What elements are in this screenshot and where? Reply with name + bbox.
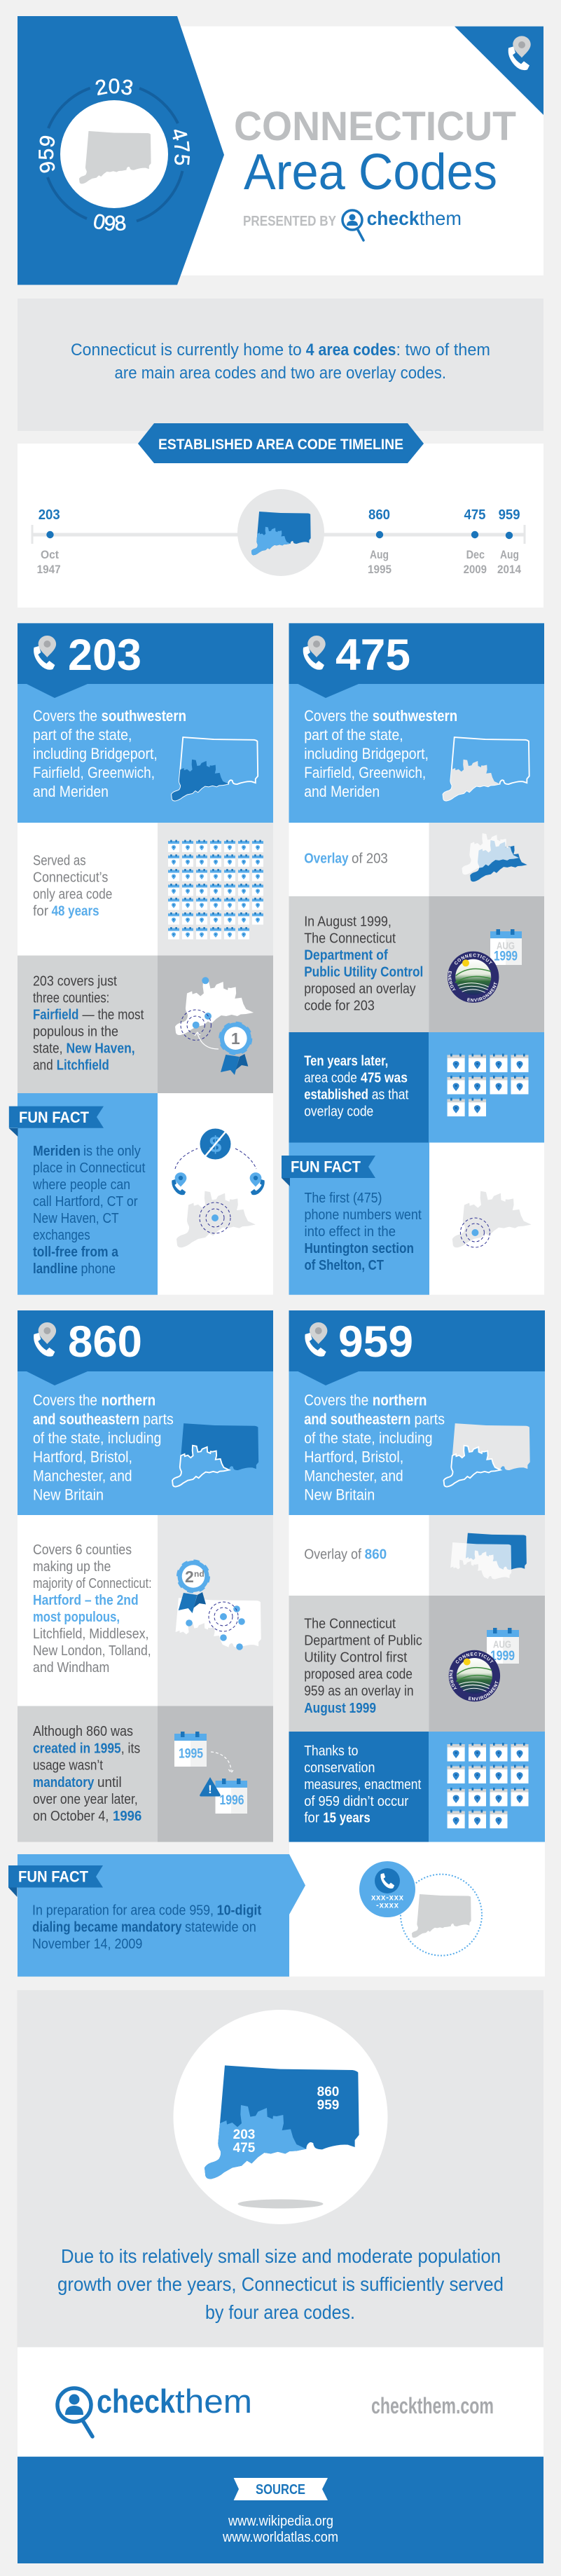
timeline banner: ESTABLISHED AREA CODE TIMELINE xyxy=(158,437,403,453)
860 counties row: Hartford – the 2nd xyxy=(33,1593,139,1608)
source links: www.worldatlas.com xyxy=(222,2530,338,2545)
203 counties xyxy=(18,956,273,1093)
fun fact text: where people can xyxy=(32,1177,130,1193)
203 header: 203 xyxy=(68,631,141,680)
860 counties row xyxy=(18,1515,273,1706)
860 counties row: and Windham xyxy=(33,1660,109,1676)
icon: energy seal: ENERGY xyxy=(449,1669,457,1690)
860 coverage text: and southeastern xyxy=(33,1410,139,1428)
203 coverage text: southwestern xyxy=(102,707,186,725)
203 counties: Fairfield xyxy=(33,1008,78,1023)
icon: calendars 1995 to 1996: ! xyxy=(208,1783,212,1796)
475 ten years row: as that xyxy=(372,1088,409,1103)
959 header: 959 xyxy=(338,1317,413,1366)
959 coverage text: Covers the xyxy=(304,1392,368,1409)
presented by logo: them xyxy=(420,207,462,229)
475 overlay row: of 203 xyxy=(352,851,388,867)
860 coverage text: New Britain xyxy=(33,1486,104,1504)
fun fact text: phone xyxy=(81,1261,116,1277)
fun fact text: In preparation for area code 959, xyxy=(32,1903,214,1919)
icon: energy seal: CONNECTICUT xyxy=(455,953,492,964)
summary map: 860 xyxy=(317,2085,339,2099)
intro panel xyxy=(18,299,543,431)
475 department row xyxy=(289,896,544,1032)
203 coverage text xyxy=(33,707,186,800)
timeline dates: Aug xyxy=(370,548,389,561)
icon: energy seal: ENVIRONMENT xyxy=(468,1680,499,1701)
203 counties: state, xyxy=(33,1041,62,1057)
panel: summary xyxy=(17,1990,543,2348)
panel: 203 xyxy=(9,623,273,1295)
icon: energy seal xyxy=(448,952,499,1003)
203 coverage text: part of the state, xyxy=(33,726,132,744)
timeline labels: 203 xyxy=(39,507,60,523)
icon: overlay maps xyxy=(462,833,527,882)
checkthem logo xyxy=(57,2383,252,2437)
959 coverage text: parts xyxy=(415,1410,445,1428)
fun fact text: call Hartford, CT or xyxy=(33,1194,138,1210)
203 coverage text: and Meriden xyxy=(33,783,109,800)
panel: wide fun fact xyxy=(8,1842,545,1977)
icon: calendars 1995 to 1996: 1995 xyxy=(179,1747,203,1762)
203 coverage text: Covers the xyxy=(33,707,97,725)
icon: ten digit dialing xyxy=(359,1861,482,1956)
475 department row: code for 203 xyxy=(304,999,375,1014)
203 coverage text: Fairfield, Greenwich, xyxy=(33,764,155,781)
959 fifteen years row: Thanks to xyxy=(304,1743,358,1759)
timeline dates: 2009 xyxy=(464,563,487,576)
959 fifteen years row: conservation xyxy=(304,1760,375,1776)
fun fact text: Meriden xyxy=(33,1144,81,1159)
203 counties: three counties: xyxy=(33,991,109,1006)
860 mandatory row: , its xyxy=(121,1741,140,1756)
475 ten years row: Ten years later, xyxy=(304,1054,388,1069)
timeline dates: Aug xyxy=(500,548,519,561)
icon: overlay maps xyxy=(450,1533,527,1580)
icon: ten digit dialing: -xxxx xyxy=(376,1902,399,1910)
475 overlay row xyxy=(289,823,544,896)
summary map: 475 xyxy=(233,2141,256,2156)
959 coverage text: northern xyxy=(373,1392,427,1409)
475 coverage text: southwestern xyxy=(373,707,457,725)
475 coverage text xyxy=(304,707,457,800)
203 counties: populous in the xyxy=(33,1025,118,1040)
fun fact text xyxy=(304,1191,422,1273)
860 coverage text: of the state, including xyxy=(33,1430,161,1446)
860 header: 860 xyxy=(68,1317,142,1366)
203 counties: New Haven, xyxy=(66,1041,135,1057)
fun fact text: landline xyxy=(33,1261,78,1277)
intro panel: Connecticut is currently home to xyxy=(71,341,302,359)
summary text xyxy=(57,2245,504,2323)
blue arrow panel with ring of area codes: 475 xyxy=(172,129,190,165)
title: CONNECTICUT xyxy=(234,104,516,149)
959 overlay row: Overlay of xyxy=(304,1547,361,1563)
860 counties row: most populous, xyxy=(33,1610,120,1625)
860 coverage text: parts xyxy=(143,1410,174,1428)
icon: calendar Aug 1999: 1999 xyxy=(490,1649,515,1664)
icon: calendar Aug 1999: AUG xyxy=(493,1639,511,1651)
source links: www.wikipedia.org xyxy=(228,2514,333,2529)
959 coverage text: Manchester, and xyxy=(304,1467,403,1484)
fun fact ribbon xyxy=(282,1156,375,1186)
203 years: for xyxy=(33,904,48,919)
summary text: Due to its relatively small size and moderate population xyxy=(61,2245,501,2267)
icon: 2nd medal with map: nd xyxy=(194,1569,205,1579)
860 mandatory row: created in 1995 xyxy=(33,1741,121,1756)
source ribbon: SOURCE xyxy=(256,2482,305,2498)
summary text: growth over the years, Connecticut is sufficiently served xyxy=(57,2273,504,2295)
475 department row: proposed an overlay xyxy=(304,982,416,997)
timeline labels xyxy=(39,507,520,523)
fun fact ribbon: FUN FACT xyxy=(19,1109,90,1126)
860 mandatory row: Although 860 was xyxy=(33,1724,133,1739)
475 map xyxy=(443,737,529,801)
475 ten years row: area code xyxy=(304,1071,357,1086)
presented by logo: PRESENTED BY xyxy=(243,214,337,229)
timeline dates: 1947 xyxy=(37,563,61,576)
475 ten years row: overlay code xyxy=(304,1104,373,1120)
fun fact text: into effect in the xyxy=(304,1224,396,1240)
475 header: 475 xyxy=(335,631,410,680)
475 coverage text: including Bridgeport, xyxy=(304,745,429,762)
source links xyxy=(222,2514,338,2545)
fun fact ribbon: FUN FACT xyxy=(291,1158,361,1176)
959 fifteen years row: of 959 didn’t occur xyxy=(304,1794,409,1809)
860 coverage text xyxy=(33,1392,174,1504)
intro panel: 4 area codes xyxy=(306,341,396,359)
15 calendars xyxy=(448,1743,528,1828)
203 counties: Litchfield xyxy=(57,1058,109,1074)
860 mandatory row: mandatory xyxy=(33,1775,95,1790)
icon: calendar Aug 1999 xyxy=(490,929,522,965)
fun fact text xyxy=(32,1144,146,1277)
959 fifteen years row: 15 years xyxy=(323,1811,370,1826)
203 years: Served as xyxy=(33,854,86,869)
860 counties row: Litchfield, Middlesex, xyxy=(33,1626,148,1642)
website: checkthem.com xyxy=(371,2393,494,2418)
959 coverage text xyxy=(304,1392,445,1504)
icon: calendar Aug 1999: 1999 xyxy=(494,950,518,964)
475 coverage text: Covers the xyxy=(304,707,368,725)
panel: logo xyxy=(18,2348,543,2457)
475 department row: Public Utility Control xyxy=(304,965,423,980)
source ribbon xyxy=(234,2478,328,2500)
timeline map xyxy=(237,489,324,576)
title xyxy=(234,104,516,200)
icon: toll-free call diagram: $ xyxy=(209,1132,222,1157)
fun fact text: of Shelton, CT xyxy=(304,1258,384,1273)
475 ten years row: established xyxy=(304,1088,368,1103)
timeline dots xyxy=(46,531,513,539)
timeline labels: 860 xyxy=(368,507,390,523)
475 ten years row: 475 was xyxy=(361,1071,408,1086)
fun fact ribbon xyxy=(9,1107,104,1137)
959 coverage text: and southeastern xyxy=(304,1410,410,1428)
blue arrow panel with ring of area codes: 203 xyxy=(95,78,133,95)
presented by logo xyxy=(243,207,462,240)
icon: calendars 1995 to 1996 xyxy=(174,1732,247,1814)
860 counties row: New London, Tolland, xyxy=(33,1643,151,1659)
timeline banner xyxy=(138,423,424,463)
475 header xyxy=(289,623,544,823)
203 counties: and xyxy=(33,1058,53,1074)
fun fact text: New Haven, CT xyxy=(33,1211,119,1226)
timeline dates xyxy=(37,548,521,576)
icon: county map with medal xyxy=(175,977,254,1075)
203 years: 48 years xyxy=(52,904,99,919)
959 department row: August 1999 xyxy=(304,1701,376,1716)
959 department row xyxy=(289,1596,545,1732)
959 department row: Utility Control first xyxy=(304,1650,408,1665)
203 years: Connecticut’s xyxy=(33,870,108,886)
timeline dates: Oct xyxy=(41,548,59,561)
959 header xyxy=(289,1310,545,1515)
timeline panel xyxy=(18,444,543,608)
fun fact text xyxy=(32,1903,262,1952)
203 counties: — the most xyxy=(83,1008,144,1023)
fun fact text: 10-digit xyxy=(217,1903,262,1919)
blue arrow panel with ring of area codes: 098 xyxy=(94,214,126,231)
icon: 2nd medal with map: 2 xyxy=(185,1568,194,1586)
icon: toll-free call diagram xyxy=(172,1128,265,1247)
203 header xyxy=(18,623,273,823)
860 mandatory row: on October 4, xyxy=(33,1809,109,1824)
fun fact text: place in Connecticut xyxy=(33,1160,146,1176)
fun fact text: November 14, 2009 xyxy=(32,1937,142,1952)
fun fact text: is the only xyxy=(83,1144,141,1159)
860 map xyxy=(172,1423,258,1487)
959 fifteen years row: for xyxy=(304,1811,319,1826)
959 coverage text: New Britain xyxy=(304,1486,375,1504)
203 coverage text: including Bridgeport, xyxy=(33,745,158,762)
summary text: by four area codes. xyxy=(205,2301,355,2323)
959 overlay row: 860 xyxy=(365,1547,387,1563)
summary map: 959 xyxy=(317,2098,339,2113)
203 years xyxy=(18,823,273,956)
icon: calendar Aug 1999: AUG xyxy=(497,940,515,952)
icon: calendar Aug 1999 xyxy=(487,1628,519,1664)
860 coverage text: Manchester, and xyxy=(33,1467,132,1484)
timeline dates: 2014 xyxy=(497,563,521,576)
panel: source xyxy=(18,2457,543,2563)
959 fifteen years row xyxy=(289,1732,545,1842)
203 years: only area code xyxy=(33,887,112,903)
959 overlay row xyxy=(289,1515,545,1596)
475 coverage text: Fairfield, Greenwich, xyxy=(304,764,426,781)
timeline dates: Dec xyxy=(466,548,485,561)
fun fact text: The first (475) xyxy=(304,1191,382,1206)
fun fact ribbon: FUN FACT xyxy=(18,1868,89,1885)
203 counties: 203 covers just xyxy=(33,974,117,989)
fun fact text: dialing became mandatory xyxy=(32,1920,182,1936)
860 coverage text: northern xyxy=(102,1392,155,1409)
860 mandatory row: 1996 xyxy=(113,1809,141,1824)
header panel xyxy=(18,16,543,285)
icon: calendars 1995 to 1996: 1996 xyxy=(220,1793,244,1808)
475 department row: The Connecticut xyxy=(304,931,396,947)
panel: 959 xyxy=(289,1310,545,1842)
icon: energy seal: ENVIRONMENT xyxy=(467,982,497,1002)
corner phone badge xyxy=(455,27,543,115)
475 coverage text: part of the state, xyxy=(304,726,403,744)
959 department row: Department of Public xyxy=(304,1633,422,1648)
959 fifteen years row: measures, enactment xyxy=(304,1777,422,1793)
475 department row: Department of xyxy=(304,948,388,964)
959 coverage text: of the state, including xyxy=(304,1430,433,1446)
timeline labels: 959 xyxy=(499,507,520,523)
860 mandatory row: until xyxy=(97,1775,122,1790)
10 calendars xyxy=(448,1054,528,1116)
860 mandatory row xyxy=(18,1706,273,1842)
blue arrow panel with ring of area codes: 959 xyxy=(39,136,55,172)
fun fact text: toll-free from a xyxy=(33,1245,119,1260)
203 fun fact xyxy=(9,1093,273,1295)
icon: energy seal xyxy=(448,1650,500,1701)
475 fun fact xyxy=(282,1142,544,1295)
intro panel: are main area codes and two are overlay codes. xyxy=(115,364,446,383)
fun fact text: Huntington section xyxy=(304,1241,414,1256)
checkthem logo: them xyxy=(175,2383,252,2420)
860 coverage text: Hartford, Bristol, xyxy=(33,1448,132,1466)
860 mandatory row: usage wasn’t xyxy=(33,1758,103,1773)
48 calendars xyxy=(168,840,263,939)
860 mandatory row: over one year later, xyxy=(33,1792,138,1807)
475 department row: In August 1999, xyxy=(304,914,392,930)
475 overlay row: Overlay xyxy=(304,851,349,867)
icon: county map with medal: 1 xyxy=(231,1029,240,1048)
fun fact text: exchanges xyxy=(33,1228,90,1243)
959 map xyxy=(444,1423,530,1487)
860 counties row: making up the xyxy=(33,1559,111,1575)
timeline labels: 475 xyxy=(464,507,486,523)
blue arrow panel with ring of area codes xyxy=(18,16,224,285)
panel: 860 xyxy=(18,1310,273,1842)
475 coverage text: and Meriden xyxy=(304,783,380,800)
959 department row: proposed area code xyxy=(304,1667,413,1683)
203 map xyxy=(172,737,258,801)
panel: 475 xyxy=(282,623,544,1295)
475 ten years row xyxy=(289,1032,544,1142)
fun fact text: phone numbers went xyxy=(304,1207,422,1223)
fun fact text: statewide on xyxy=(185,1920,256,1936)
summary map xyxy=(174,2010,388,2224)
fun fact ribbon xyxy=(8,1865,103,1897)
860 header xyxy=(18,1310,273,1515)
intro panel: : two of them xyxy=(396,341,490,359)
959 department row: 959 as an overlay in xyxy=(304,1684,414,1699)
860 counties row: Covers 6 counties xyxy=(33,1542,132,1558)
959 coverage text: Hartford, Bristol, xyxy=(304,1448,403,1466)
959 department row: The Connecticut xyxy=(304,1616,396,1631)
timeline dates: 1995 xyxy=(368,563,392,576)
icon: energy seal: ENERGY xyxy=(448,971,456,991)
icon: energy seal: CONNECTICUT xyxy=(455,1652,493,1664)
icon: Shelton map xyxy=(452,1191,532,1247)
title: Area Codes xyxy=(244,144,497,200)
860 coverage text: Covers the xyxy=(33,1392,97,1409)
checkthem logo: check xyxy=(97,2383,176,2420)
860 counties row: majority of Connecticut: xyxy=(33,1576,152,1591)
summary map: 203 xyxy=(233,2128,255,2142)
icon: 2nd medal with map xyxy=(176,1561,261,1650)
presented by logo: check xyxy=(367,207,420,229)
icon: ten digit dialing: xxx-xxx xyxy=(371,1893,404,1902)
